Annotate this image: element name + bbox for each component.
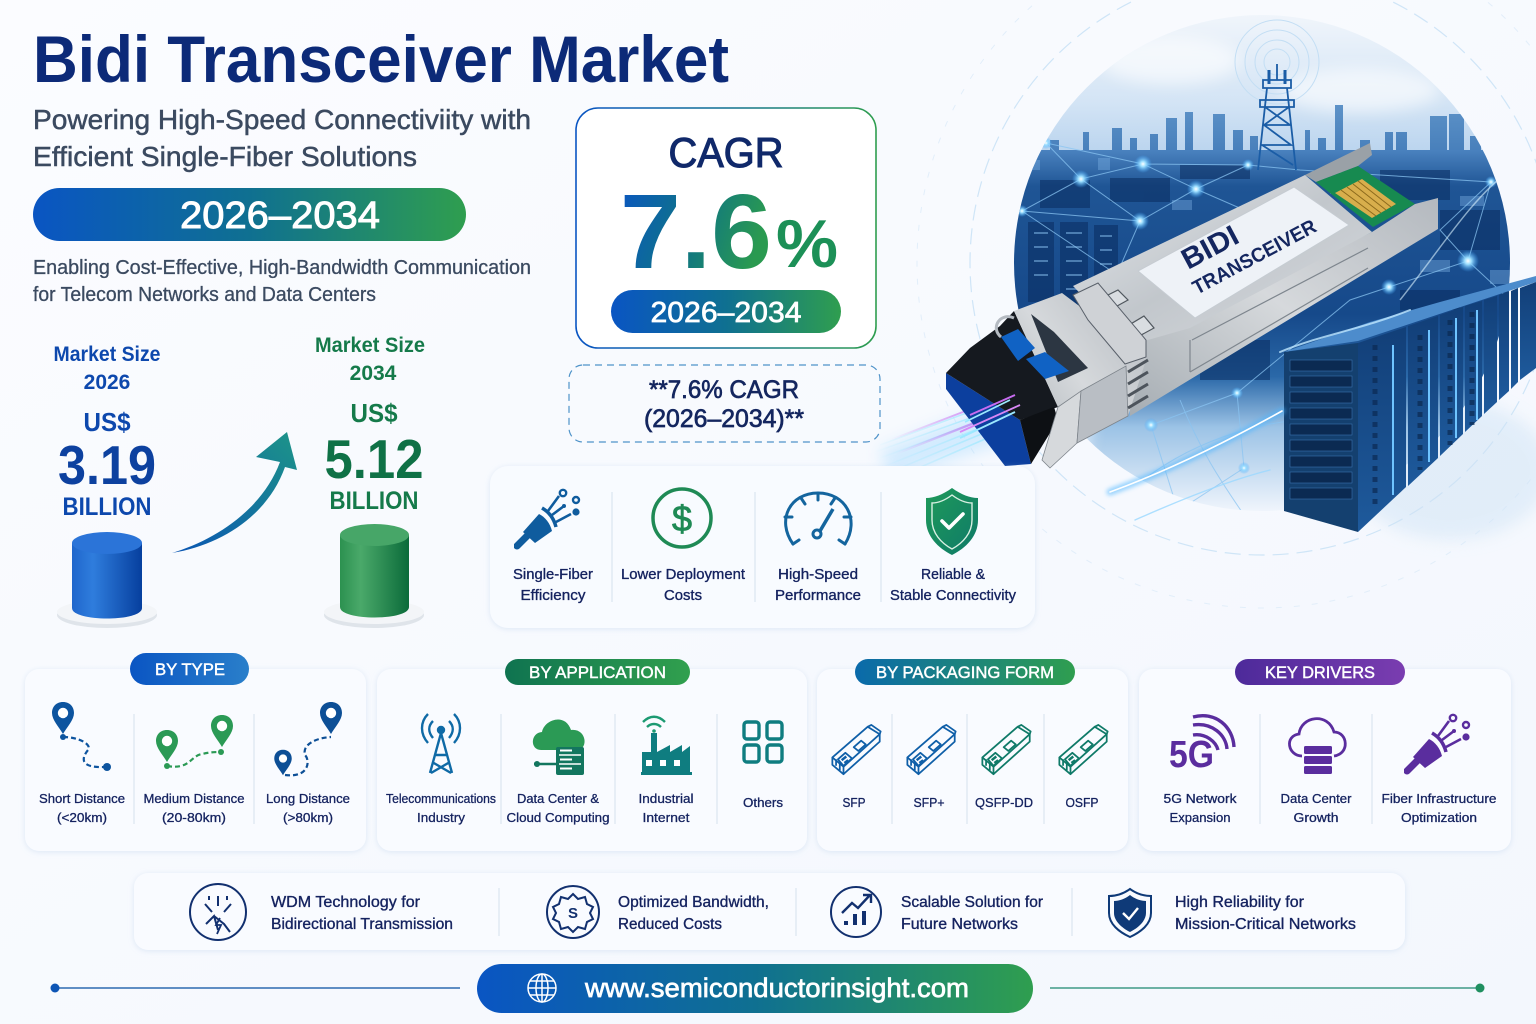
label: data center growth: Growth [1294, 810, 1338, 825]
heading: by application [505, 659, 690, 685]
label: short distance: (<20km) [57, 810, 107, 825]
label: 5G network [1164, 791, 1237, 825]
CAGR card [576, 108, 876, 348]
market size 2026: Market Size [54, 343, 160, 366]
icon: fiber optimization [1407, 715, 1470, 771]
subtitle [33, 104, 531, 172]
CAGR card: 2026–2034 [650, 297, 802, 329]
icon: globe [528, 974, 556, 1002]
subtitle: Powering High-Speed Connectiviity with [33, 104, 531, 135]
icon: green shield [926, 488, 978, 555]
heading: key drivers [1235, 659, 1405, 685]
transceiver module [946, 143, 1438, 468]
market size 2034: Market Size [315, 334, 425, 357]
panel: key drivers [1139, 659, 1511, 851]
title: Bidi Transceiver Market [33, 22, 729, 96]
label: industrial internet: Internet [642, 810, 690, 825]
dashed CAGR note: (2026–2034)** [644, 405, 804, 433]
text: scalable solution [901, 894, 1043, 933]
heading: by packaging form: BY PACKAGING FORM [876, 663, 1054, 682]
benefit label: high speed [775, 566, 861, 604]
label: OSFP: OSFP [1066, 795, 1098, 810]
label: SFP+: SFP+ [914, 795, 944, 810]
text: scalable solution: Scalable Solution for [901, 894, 1043, 911]
website pill [477, 964, 1033, 1013]
panel: by type [25, 653, 366, 851]
benefit label: lower costs: Costs [664, 587, 702, 604]
label text BIDI TRANSCEIVER: TRANSCEIVER [1189, 215, 1321, 299]
label: data center growth [1280, 791, 1352, 825]
server racks [1284, 276, 1536, 532]
benefit label: high speed: Performance [775, 587, 861, 604]
icon: fiber cable [517, 490, 580, 546]
icon: short distance route [52, 702, 111, 771]
label: industrial internet [638, 791, 694, 825]
label: telecommunications [386, 791, 496, 825]
icon: cloud data center [1289, 719, 1345, 774]
label: SFP: SFP [842, 795, 866, 810]
benefit label: reliable [890, 566, 1016, 604]
footer rule right [1050, 984, 1484, 992]
panel: by application [377, 659, 807, 851]
market size 2026: US$ [84, 407, 131, 437]
icon: reliability shield [1109, 889, 1151, 937]
text: WDM technology [271, 894, 453, 933]
text: high reliability: Mission-Critical Networks [1175, 916, 1356, 933]
panel: by packaging form [817, 659, 1128, 851]
label: long distance [266, 791, 350, 825]
label: fiber infrastructure: Fiber Infrastructure [1382, 791, 1496, 806]
benefit label: single fiber: Single-Fiber [513, 566, 593, 583]
benefit label: high speed: High-Speed [778, 566, 858, 583]
label: data center cloud: Data Center & [517, 791, 599, 806]
period pill: 2026–2034 [180, 195, 380, 237]
subtitle: Efficient Single-Fiber Solutions [33, 141, 417, 172]
text: optimized bandwidth: Optimized Bandwidth, [618, 894, 769, 911]
website text: www.semiconductorinsight.com [584, 973, 969, 1003]
icon: 5G waves [1169, 716, 1234, 776]
market size 2034: BILLION [330, 487, 418, 515]
icon: others grid [744, 722, 782, 762]
label: medium distance: Medium Distance [144, 791, 244, 806]
description text: for Telecom Networks and Data Centers [33, 284, 376, 306]
CAGR card: 7.6 [620, 173, 772, 291]
label: 5G network: 5G Network [1164, 791, 1237, 806]
benefit label: reliable: Reliable & [921, 566, 985, 583]
label: 5G network: Expansion [1170, 810, 1230, 825]
benefit label: lower costs [621, 566, 746, 604]
icon: dollar coin: $ [672, 498, 692, 539]
cylinder 2034 [324, 524, 424, 628]
heading: by application: BY APPLICATION [529, 663, 666, 682]
icon: telecom tower [422, 714, 460, 773]
label text BIDI TRANSCEIVER: BIDI [1176, 220, 1244, 276]
label: short distance: Short Distance [39, 791, 125, 806]
hero illustration: city, servers and transceiver [875, 0, 1536, 608]
footer rule left [50, 984, 460, 992]
label: telecommunications: Industry [417, 810, 466, 825]
CAGR card: % [776, 206, 838, 282]
icon: long distance route [274, 702, 342, 775]
label: fiber infrastructure [1382, 791, 1496, 825]
label: industrial internet: Industrial [638, 791, 694, 806]
icon: medium distance route [156, 715, 233, 769]
label: medium distance: (20-80km) [162, 810, 226, 825]
icon: bandwidth gear [547, 886, 599, 938]
CAGR card: CAGR [668, 129, 784, 176]
label: fiber infrastructure: Optimization [1401, 810, 1477, 825]
heading: key drivers: KEY DRIVERS [1265, 663, 1375, 682]
icon: bandwidth gear: S [568, 905, 578, 922]
panel: technology highlights strip [134, 873, 1405, 950]
icon: dollar coin [653, 489, 711, 547]
market size 2026 [54, 343, 160, 521]
label: short distance [39, 791, 125, 825]
text: high reliability: High Reliability for [1175, 894, 1304, 911]
heading: by type [130, 653, 249, 685]
icon: OSFP module [1059, 725, 1108, 774]
market size 2034: US$ [350, 398, 398, 428]
label: long distance: (>80km) [283, 810, 333, 825]
label: medium distance [144, 791, 244, 825]
market size 2026: 2026 [84, 371, 130, 394]
light streaks on floor [1110, 310, 1410, 520]
market size 2026: BILLION [62, 493, 152, 521]
heading: by type: BY TYPE [155, 660, 225, 679]
benefit label: reliable: Stable Connectivity [890, 587, 1016, 604]
icon: cloud server [533, 719, 585, 775]
tower with radio rings [1235, 20, 1319, 170]
dashed CAGR note: **7.6% CAGR [649, 376, 799, 404]
cylinder 2026 [57, 532, 157, 628]
text: WDM technology: Bidirectional Transmission [271, 916, 453, 933]
benefit label: lower costs: Lower Deployment [621, 566, 746, 583]
period pill [33, 188, 466, 241]
label: data center cloud: Cloud Computing [506, 810, 610, 825]
market size 2034: 2034 [350, 362, 397, 385]
growth arrow [172, 432, 297, 553]
text: WDM technology: WDM Technology for [271, 894, 420, 911]
dashed CAGR note [569, 365, 880, 442]
icon: 5G waves: 5G [1169, 734, 1214, 776]
icon: SFP module [832, 725, 881, 774]
label: long distance: Long Distance [266, 791, 350, 806]
label: data center cloud [506, 791, 610, 825]
label: telecommunications: Telecommunications [386, 791, 496, 806]
icon: WDM technology [190, 884, 246, 940]
description text: Enabling Cost-Effective, High-Bandwidth Communication [33, 257, 531, 279]
label: data center growth: Data Center [1280, 791, 1352, 806]
heading: by packaging form [855, 659, 1075, 685]
description text [33, 257, 531, 306]
icon: scalable growth chart [831, 887, 881, 937]
text: optimized bandwidth [618, 894, 769, 933]
market size 2026: 3.19 [58, 434, 156, 496]
city background circle [990, 15, 1510, 520]
icon: SFP+ module [907, 725, 956, 774]
market size 2034: 5.12 [324, 428, 424, 490]
market size 2034 [315, 334, 425, 515]
benefit label: single fiber: Efficiency [520, 587, 586, 604]
text: optimized bandwidth: Reduced Costs [618, 916, 722, 933]
icon: QSFP-DD module [982, 725, 1031, 774]
panel: key benefits [490, 466, 1035, 628]
benefit label: single fiber [513, 566, 593, 604]
label: QSFP-DD: QSFP-DD [975, 795, 1033, 810]
text: high reliability [1175, 894, 1356, 933]
label: others: Others [743, 795, 784, 810]
fiber light beams [875, 392, 1020, 480]
icon: speedometer [785, 493, 851, 544]
icon: smart factory [641, 717, 692, 775]
text: scalable solution: Future Networks [901, 916, 1018, 933]
